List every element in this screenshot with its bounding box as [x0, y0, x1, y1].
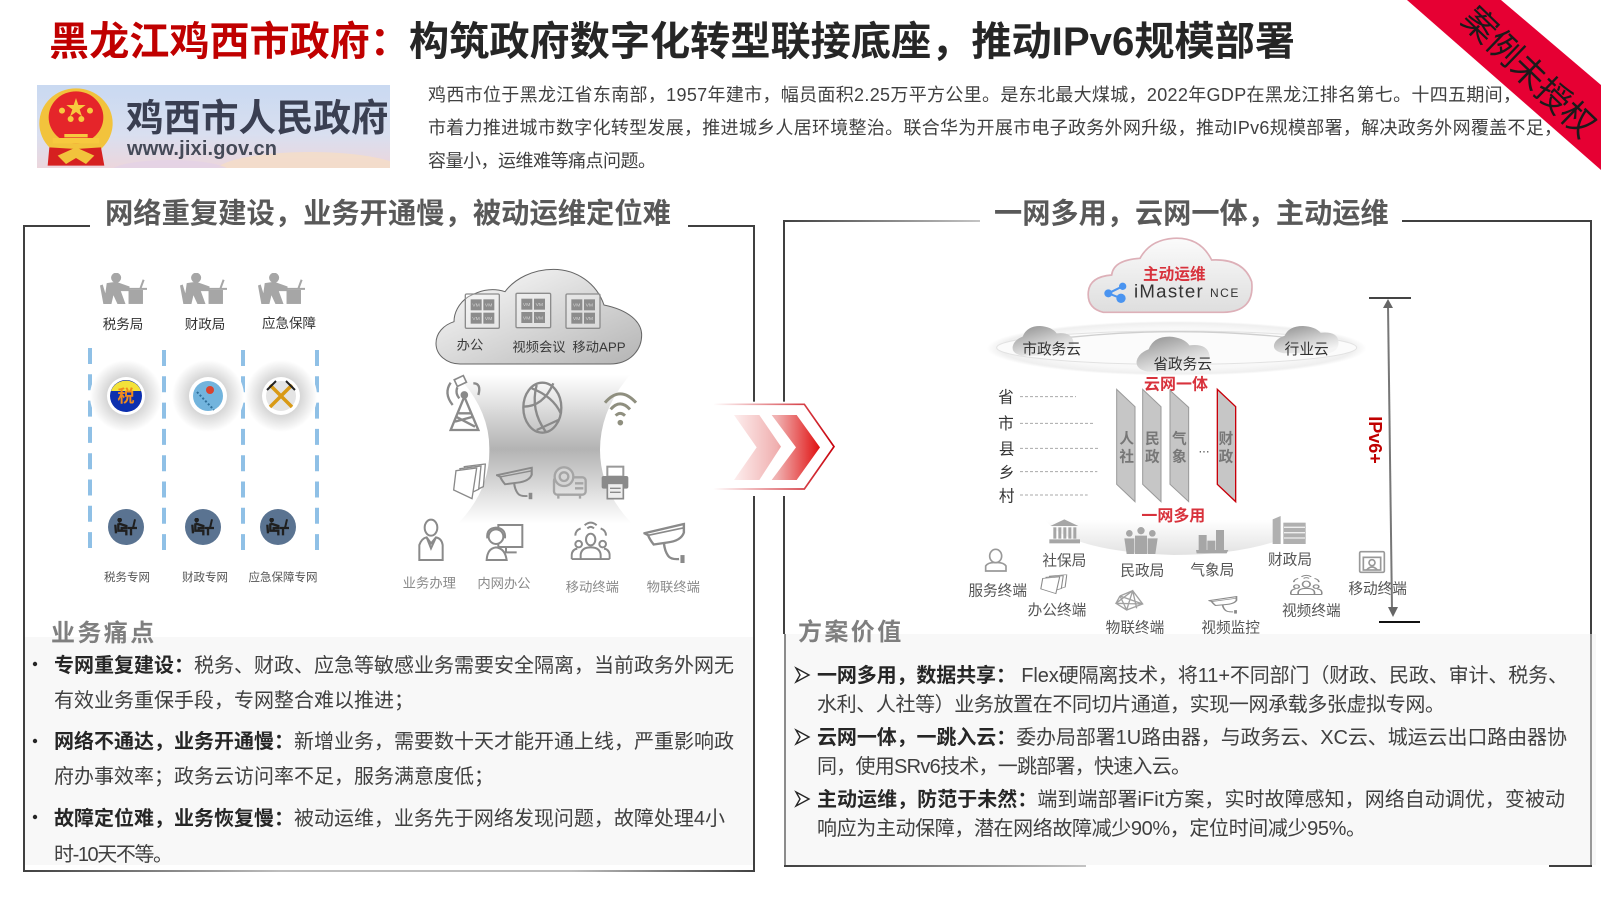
labels: admin tiers: 省 [998, 388, 1014, 406]
diagram: dedicated networks per department [90, 273, 318, 584]
VM captions: VM [472, 316, 480, 322]
icon row: private network terminals [108, 509, 296, 545]
VM captions: VM [523, 302, 530, 308]
arrow: transition chevrons [713, 402, 834, 496]
labels: endpoints: 业务办理 [403, 575, 456, 590]
labels: departments and terminals: 办公终端 [1028, 602, 1087, 619]
bullet list: 云网一体，一跳入云：委办局部署1U路由器，与政务云、XC云、城运云出口路由器协 [817, 726, 1567, 749]
labels: departments and terminals: 民政局 [1120, 563, 1164, 580]
labels: departments and terminals: 视频监控 [1201, 620, 1260, 637]
labels: departments: 财政局 [185, 317, 225, 332]
icon: camera in band [497, 468, 532, 499]
icon: video camera [1209, 597, 1237, 614]
labels: admin tiers: 市 [998, 415, 1014, 433]
bowl [1045, 520, 1280, 555]
lower diagram block [968, 506, 1407, 637]
cloud: provincial: 省政务云 [1153, 356, 1212, 373]
label: cloud-network integration: 云网一体 [1144, 376, 1208, 394]
icon: video group [1291, 575, 1322, 594]
cloud: applications: 视频会议 [512, 339, 566, 354]
icon: globe [523, 383, 561, 433]
icon: tax bureau badge [90, 360, 162, 432]
diagram: shared cloud with endpoints [403, 269, 700, 594]
panel: right solution frame [784, 220, 1591, 634]
heading: solution value: 方案价值 [798, 618, 904, 646]
icon: low buildings [1196, 530, 1228, 553]
VM captions: VM [523, 315, 530, 321]
labels: departments and terminals: 气象局 [1190, 562, 1234, 579]
VM captions: VM [485, 316, 492, 322]
slice: finance: 政 [1219, 449, 1234, 466]
heading: left section: 网络重复建设，业务开通慢，被动运维定位难 [105, 197, 671, 229]
labels: endpoints: 内网办公 [477, 576, 531, 591]
labels: departments and terminals: 服务终端 [968, 583, 1027, 600]
VM captions [472, 302, 593, 322]
panel: solution value [784, 618, 1596, 867]
bullet list: 专网重复建设：税务、财政、应急等敏感业务需要安全隔离，当前政务外网无 [54, 654, 734, 677]
slice: finance: 财 [1219, 430, 1234, 447]
bullet list: 时-10天不等。 [54, 843, 173, 866]
slice: civil affairs [1143, 389, 1161, 502]
bullet list: 水利、人社等）业务放置在不同切片通道，实现一网承载多张虚拟专网。 [817, 693, 1445, 716]
labels: departments and terminals: 社保局 [1042, 553, 1086, 570]
ribbon: case not authorized: 案例未授权 [1454, 0, 1601, 145]
icon: business user [419, 520, 443, 560]
cloud: applications [436, 269, 642, 364]
icon: emergency badge [245, 360, 317, 432]
labels: departments and terminals: 视频终端 [1282, 603, 1341, 620]
cloud: applications: 办公 [457, 338, 483, 353]
slice: civil affairs: 政 [1145, 449, 1160, 466]
labels: departments and terminals: 财政局 [1268, 551, 1312, 568]
VM captions: VM [536, 315, 543, 321]
labels: private networks [104, 570, 318, 584]
bullet list: 有效业务重保手段，专网整合难以推进； [54, 689, 414, 712]
labels: private networks: 应急保障专网 [248, 570, 318, 584]
VM captions: VM [536, 302, 543, 308]
logo: Jixi municipal government banner: 鸡西市人民政府 [126, 97, 388, 139]
bullet dots [33, 662, 37, 819]
icon: wifi [605, 394, 636, 424]
cloud: iMaster NCE: NCE [1210, 286, 1238, 300]
cloud: iMaster NCE: 主动运维 [1143, 264, 1206, 283]
slices: isolated channels [1117, 389, 1236, 502]
cloud: municipal [1013, 326, 1081, 358]
slice: social: 社 [1119, 448, 1134, 466]
VM captions: VM [472, 303, 480, 309]
arrow: IPv6+ span: IPv6+ [1365, 416, 1385, 464]
slice: social: 人 [1119, 430, 1134, 447]
cloud: industry: 行业云 [1285, 341, 1329, 358]
icon: tax bureau badge: 税 [118, 387, 134, 406]
labels: admin tiers: 县 [999, 442, 1014, 459]
labels: private networks: 财政专网 [182, 570, 228, 584]
bullet list: 府办事效率；政务云访问率不足，服务满意度低； [54, 765, 494, 788]
cloud: applications: 移动APP [572, 339, 626, 354]
icon: support agent [487, 525, 522, 560]
cloud: industry [1274, 326, 1339, 358]
labels: endpoints [403, 575, 700, 594]
icon: projector [554, 467, 586, 499]
arrow: IPv6+ span [1365, 298, 1420, 622]
icon: NCE logo [1104, 283, 1126, 303]
VM captions: VM [586, 316, 593, 322]
icon: national emblem [39, 88, 113, 166]
icon: finance bureau badge [172, 360, 244, 432]
ellipsis: ... [1198, 440, 1210, 455]
slice: weather: 象 [1172, 448, 1187, 466]
panel: left problem frame [23, 226, 755, 872]
diagram: one network with cloud-network integration [968, 238, 1420, 637]
icon: service user [986, 549, 1006, 571]
cloud: municipal: 市政务云 [1022, 341, 1081, 358]
bullet list: 一网多用，数据共享： Flex硬隔离技术，将11+不同部门（财政、民政、审计、税务、 [817, 664, 1568, 687]
intro paragraph [428, 85, 1562, 171]
title: 黑龙江鸡西市政府： [49, 20, 410, 64]
tier dashes [1020, 397, 1099, 495]
icon: office tablets [1041, 575, 1067, 594]
VM captions: VM [573, 303, 580, 309]
labels: endpoints: 物联终端 [647, 579, 700, 594]
labels: departments [103, 315, 316, 332]
VM server blocks [465, 293, 600, 328]
slice: social [1117, 389, 1135, 502]
icon: mobile group [572, 523, 610, 559]
VM captions: VM [573, 316, 580, 322]
icon: mobile terminal [1360, 552, 1384, 572]
title: 构筑政府数字化转型联接底座，推动IPv6规模部署 [409, 20, 1295, 64]
labels: departments and terminals: 物联终端 [1106, 620, 1165, 637]
panel: business pain points [25, 620, 753, 866]
bullet list [33, 654, 734, 866]
logo: Jixi municipal government banner [37, 85, 390, 168]
bullet list: 响应为主动保障，潜在网络故障减少90%，定位时间减少95%。 [817, 817, 1366, 840]
intro paragraph: 容量小，运维难等痛点问题。 [428, 151, 656, 171]
labels: departments: 税务局 [103, 317, 143, 332]
VM captions: VM [485, 303, 492, 309]
intro paragraph: 市着力推进城市数字化转型发展，推进城乡人居环境整治。联合华为开展市电子政务外网升级，推动IPv6规模部署，解决政务外网覆盖不足， [428, 118, 1562, 138]
bullet list: 主动运维，防范于未然：端到端部署iFit方案，实时故障感知，网络自动调优，变被动 [817, 787, 1565, 811]
icon: IoT camera [644, 524, 685, 563]
label: one network multi-use: 一网多用 [1141, 506, 1205, 525]
icon: people [1124, 527, 1158, 554]
bullet list: 网络不通达，业务开通慢：新增业务，需要数十天才能开通上线，严重影响政 [54, 729, 734, 753]
icon: high buildings [1273, 516, 1306, 544]
icon row: department users [100, 273, 305, 304]
labels: admin tiers: 村 [999, 487, 1015, 505]
arrow bullets [796, 668, 809, 806]
heading: right section: 一网多用，云网一体，主动运维 [994, 197, 1389, 229]
labels: departments and terminals [968, 551, 1407, 637]
icon: radio tower [447, 376, 479, 430]
dashed blue channel lines [90, 348, 317, 550]
labels: admin tiers [998, 388, 1015, 505]
upper diagram block [987, 238, 1367, 505]
icon: printer [602, 467, 628, 499]
icon: bank [1049, 519, 1080, 543]
logo: Jixi municipal government banner: www.jixi.gov.cn [126, 138, 277, 160]
labels: admin tiers: 乡 [999, 465, 1014, 482]
slice: finance [1217, 389, 1236, 502]
slice: weather: 气 [1172, 429, 1187, 447]
slice: civil affairs: 民 [1145, 431, 1160, 447]
hourglass network band [457, 375, 632, 523]
intro paragraph: 鸡西市位于黑龙江省东南部，1957年建市，幅员面积2.25万平方公里。是东北最大煤城，2022年GDP在黑龙江排名第七。十四五期间， [428, 85, 1521, 105]
icon: IoT mesh [1116, 591, 1143, 610]
labels: private networks: 税务专网 [104, 570, 150, 584]
cloud disc [987, 321, 1367, 376]
bullet list: 同，使用SRv6技术，一跳部署，快速入云。 [817, 755, 1191, 778]
VM captions: VM [586, 303, 593, 309]
cloud: iMaster NCE: iMaster [1134, 280, 1203, 301]
heading: pain points: 业务痛点 [51, 620, 157, 647]
icon: tablets [454, 464, 485, 499]
bullet list: 故障定位难，业务恢复慢：被动运维，业务先于网络发现问题，故障处理4小 [54, 806, 725, 830]
labels: departments: 应急保障 [262, 315, 316, 331]
cloud: provincial [1137, 337, 1212, 373]
labels: departments and terminals: 移动终端 [1348, 581, 1407, 598]
ribbon: case not authorized [1407, 0, 1601, 170]
slice: weather [1170, 390, 1189, 502]
bullet list [796, 664, 1568, 840]
labels: endpoints: 移动终端 [566, 579, 619, 594]
cloud: iMaster NCE [1088, 238, 1252, 312]
